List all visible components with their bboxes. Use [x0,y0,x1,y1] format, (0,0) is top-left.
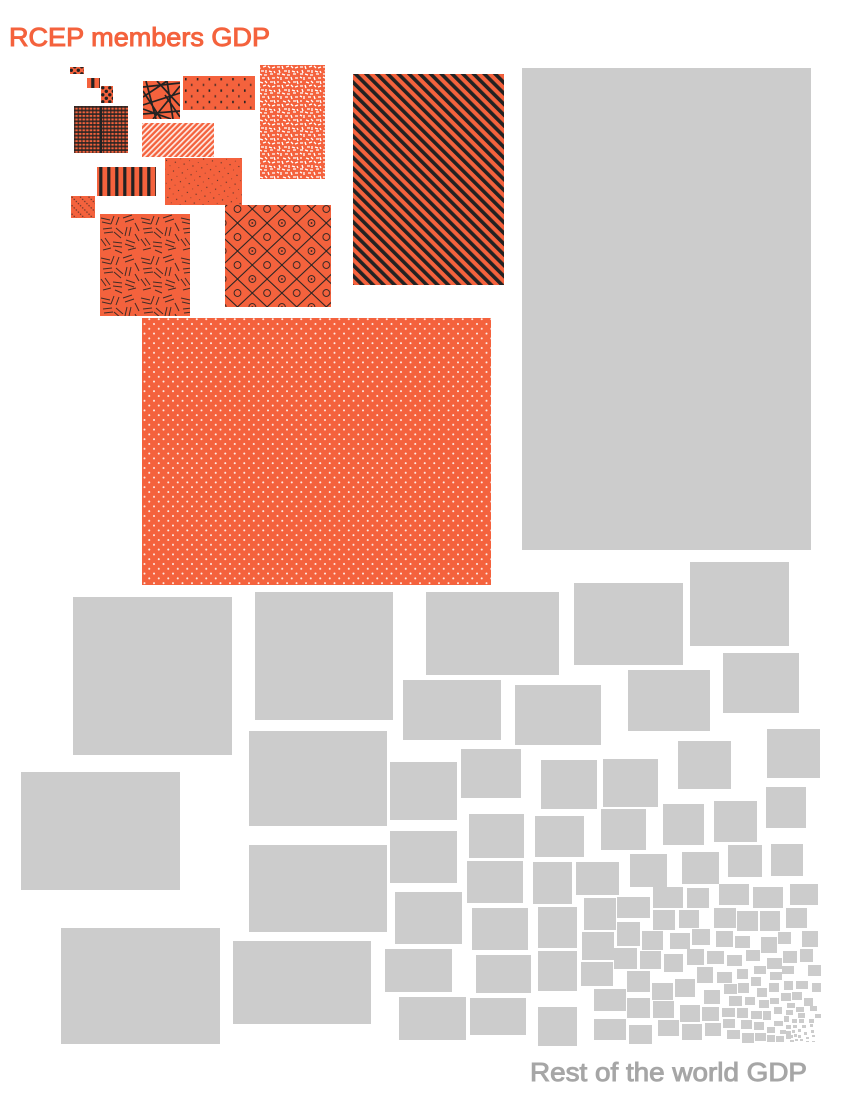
block: fine speckle pattern [165,158,242,205]
block: woven grid pattern [74,106,128,153]
block: tiny stripes pattern [87,78,100,88]
block: white noise pattern [260,65,325,179]
block: small checker pattern [101,86,113,103]
block: tiny dark pattern [70,67,84,74]
tiny economy blocks [717,965,821,1043]
block: small dark dots pattern [183,76,255,110]
block: second RCEP member, dark diagonal stripes [353,74,504,285]
title: RCEP members GDP: RCEP members GDP [9,22,270,52]
large economy blocks [21,592,393,1044]
block: crossing lines pattern [143,81,180,119]
block: vertical bars pattern [97,167,156,196]
panel: RCEP member blocks [70,65,504,585]
block: small diagonal dots pattern [71,196,95,218]
block: diamonds and circles pattern [225,205,331,307]
small economy blocks [581,884,818,1044]
block: dashes pattern [100,214,190,316]
block: white diagonal stripes [142,123,214,157]
title: Rest of the world GDP: Rest of the world GDP [530,1057,807,1087]
medium economy blocks [385,562,820,1046]
block: largest rest of world economy [522,68,811,550]
block: largest RCEP member, white dots [142,318,491,585]
